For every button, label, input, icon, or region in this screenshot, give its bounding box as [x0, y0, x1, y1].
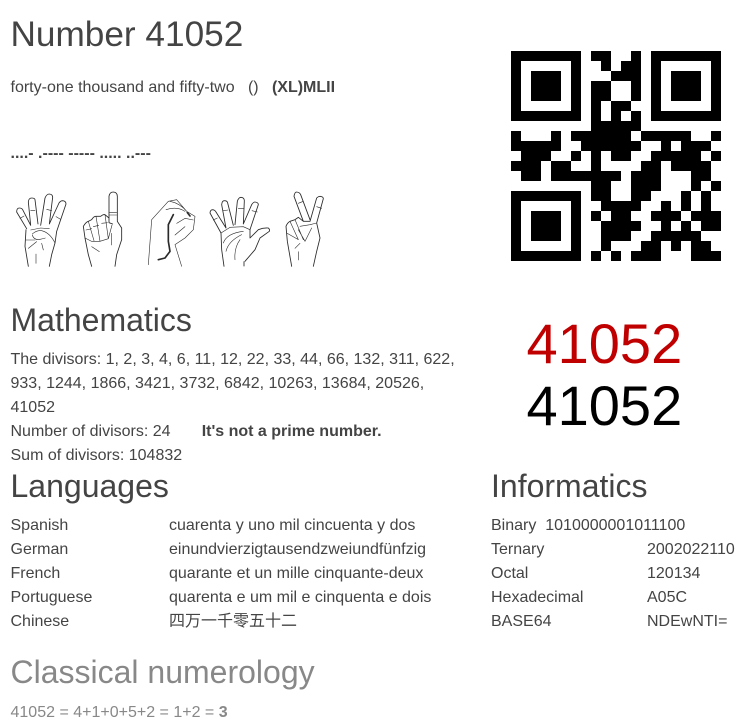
panel: languages table: [10, 517, 431, 630]
title: Number 41052: [10, 15, 243, 54]
number in words and roman numeral: forty-one thousand and fifty-two () (XL)MLII: [10, 79, 335, 96]
base values: 2002022110 120134 A05C NDEwNTI=: [647, 541, 735, 630]
icon: hand four: [17, 194, 66, 266]
QR code: [511, 51, 721, 261]
big number red: 41052: [526, 312, 682, 375]
heading: classical numerology: Classical numerology: [10, 654, 315, 690]
icon: hand five: [210, 197, 270, 266]
morse code: ....- .---- ----- ..... ..---: [10, 145, 151, 162]
heading: informatics: Informatics: [491, 468, 647, 504]
icon: hand one: [83, 192, 122, 266]
sign language hands: [16, 192, 324, 267]
divisors text block: The divisors: 1, 2, 3, 4, 6, 11, 12, 22, 33, 44, 66, 132, 311, 622, 933, 1244, 1866, 3421, 3732, 6842, 10263, 13684, 20526, 41052 Number of divisors: 24 It's not a prime number. Sum of divisors: 104832: [10, 351, 455, 464]
panel: informatics table: [491, 517, 735, 630]
big number black: 41052: [526, 374, 682, 437]
heading: mathematics: Mathematics: [10, 302, 192, 338]
language names: Spanish German French Portuguese Chinese: [10, 517, 92, 630]
icon: hand zero: [148, 200, 195, 266]
base names: Ternary Octal Hexadecimal BASE64: [491, 541, 583, 630]
translations: cuarenta y uno mil cincuenta y dos einundvierzigtausendzweiundfünfzig quarante et un mille cinquante-deux quarenta e um mil e cinquenta e dois 四万一千零五十二: [169, 517, 431, 630]
icon: hand two: [286, 192, 323, 266]
binary row: Binary 1010000001011100: [491, 517, 685, 534]
heading: languages: Languages: [10, 468, 169, 504]
numerology sum: 41052 = 4+1+0+5+2 = 1+2 = 3: [10, 704, 228, 721]
